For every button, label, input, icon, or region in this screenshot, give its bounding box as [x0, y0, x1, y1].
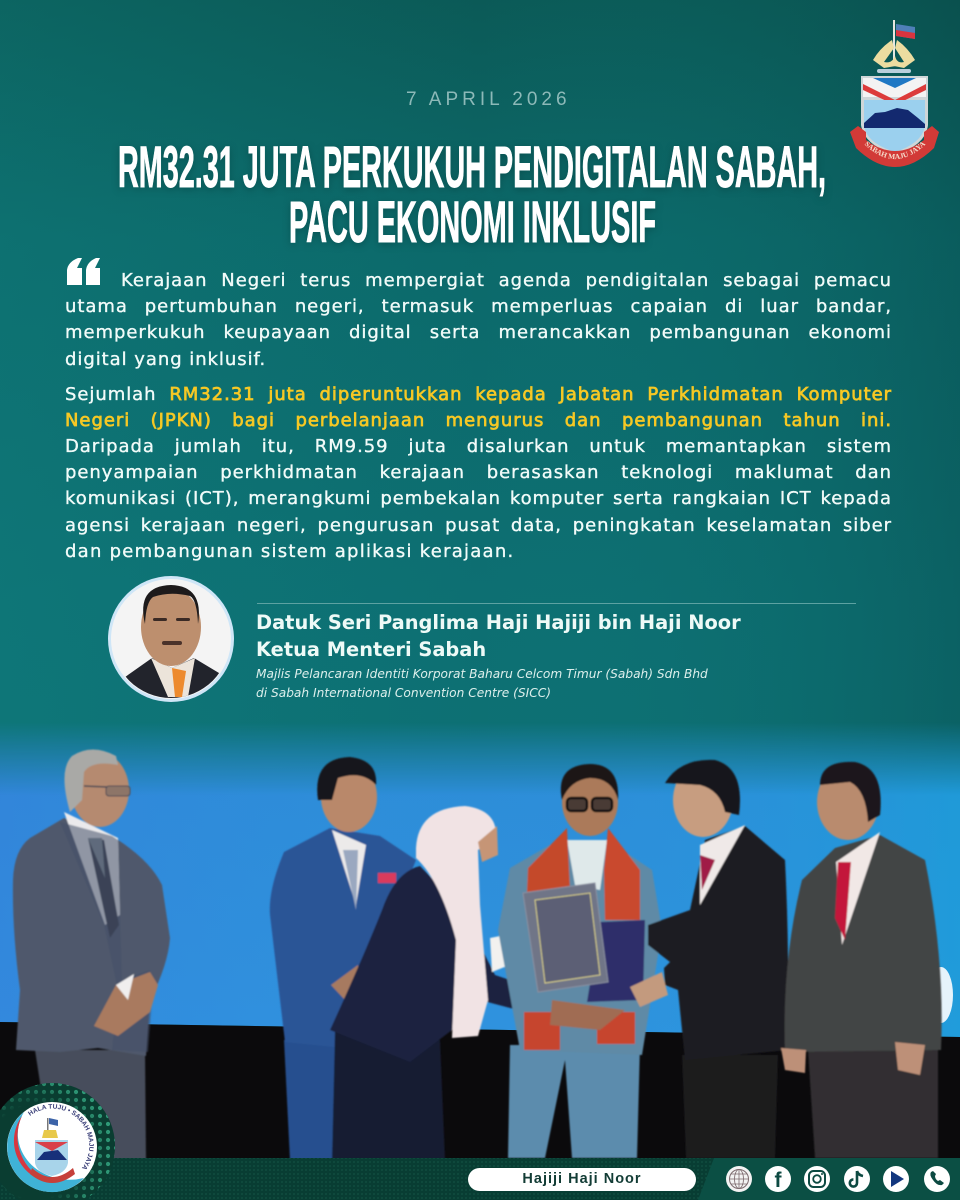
speaker name and role: Datuk Seri Panglima Haji Hajiji bin Haji Noor	[256, 611, 741, 634]
paragraph 1	[65, 270, 892, 370]
paragraph 1: memperkukuh keupayaan digital serta merancakkan pembangunan ekonomi	[65, 322, 892, 343]
icon: instagram	[804, 1166, 830, 1192]
speaker name and role	[256, 611, 741, 661]
paragraph 2	[65, 384, 892, 562]
blue stage screen	[0, 712, 960, 1037]
person 6: dark grey suit	[781, 762, 942, 1158]
name pill: Hajiji Haji Noor	[522, 1171, 642, 1187]
icon: facebook: f	[774, 1169, 782, 1192]
quote mark	[67, 258, 100, 285]
event caption: di Sabah International Convention Centre (SICC)	[256, 686, 551, 700]
paragraph 2: agensi kerajaan negeri, pengurusan pusat data, peningkatan keselamatan siber	[65, 515, 892, 536]
icon: facebook	[765, 1166, 791, 1192]
round Hala Tuju logo: HALA TUJU • SABAH MAJU JAYA	[28, 1104, 94, 1170]
paragraph 1: utama pertumbuhan negeri, termasuk memperluas capaian di luar bandar,	[65, 296, 892, 317]
emblem: Sabah state crest: SABAH MAJU JAYA	[864, 142, 926, 160]
paragraph 1: Kerajaan Negeri terus mempergiat agenda pendigitalan sebagai pemacu	[121, 270, 892, 291]
icon: tiktok	[844, 1166, 870, 1192]
speaker divider	[257, 603, 856, 604]
event caption	[256, 667, 708, 700]
paragraph 2: penyampaian perkhidmatan kerajaan berasaskan teknologi maklumat dan	[65, 462, 892, 483]
event photo: six people on stage	[0, 728, 960, 1158]
round Hala Tuju logo	[0, 1083, 115, 1198]
icon: globe	[726, 1166, 752, 1192]
paragraph 2: Daripada jumlah itu, RM9.59 juta disalurkan untuk memantapkan sistem	[65, 436, 892, 457]
emblem: Sabah state crest	[850, 20, 939, 167]
person 5: black suit	[630, 760, 788, 1158]
title	[118, 135, 826, 255]
event caption: Majlis Pelancaran Identiti Korporat Baharu Celcom Timur (Sabah) Sdn Bhd	[256, 667, 708, 681]
paragraph 2: Negeri (JPKN) bagi perbelanjaan mengurus dan pembangunan tahun ini.	[65, 410, 892, 431]
person 4: teal jacket with woven scarf	[498, 764, 662, 1158]
paragraph 2: Sejumlah RM32.31 juta diperuntukkan kepada Jabatan Perkhidmatan Komputer	[65, 384, 892, 405]
icon: play	[883, 1166, 909, 1192]
paragraph 2: dan pembangunan sistem aplikasi kerajaan.	[65, 541, 514, 562]
person 1: grey suit	[13, 750, 170, 1160]
memorandum folders	[523, 883, 645, 1002]
person 2: blue suit	[270, 757, 416, 1160]
name pill	[468, 1168, 696, 1191]
date: 7 APRIL 2026	[406, 89, 571, 110]
icon: phone	[924, 1166, 950, 1192]
speaker portrait	[108, 576, 234, 702]
paragraph 1: digital yang inklusif.	[65, 349, 266, 370]
person 3: woman in white hijab and navy suit	[330, 806, 555, 1160]
black stage floor	[0, 1022, 960, 1160]
speaker name and role: Ketua Menteri Sabah	[256, 638, 486, 661]
paragraph 2: komunikasi (ICT), merangkumi pembekalan komputer serta rangkaian ICT kepada	[65, 488, 892, 509]
